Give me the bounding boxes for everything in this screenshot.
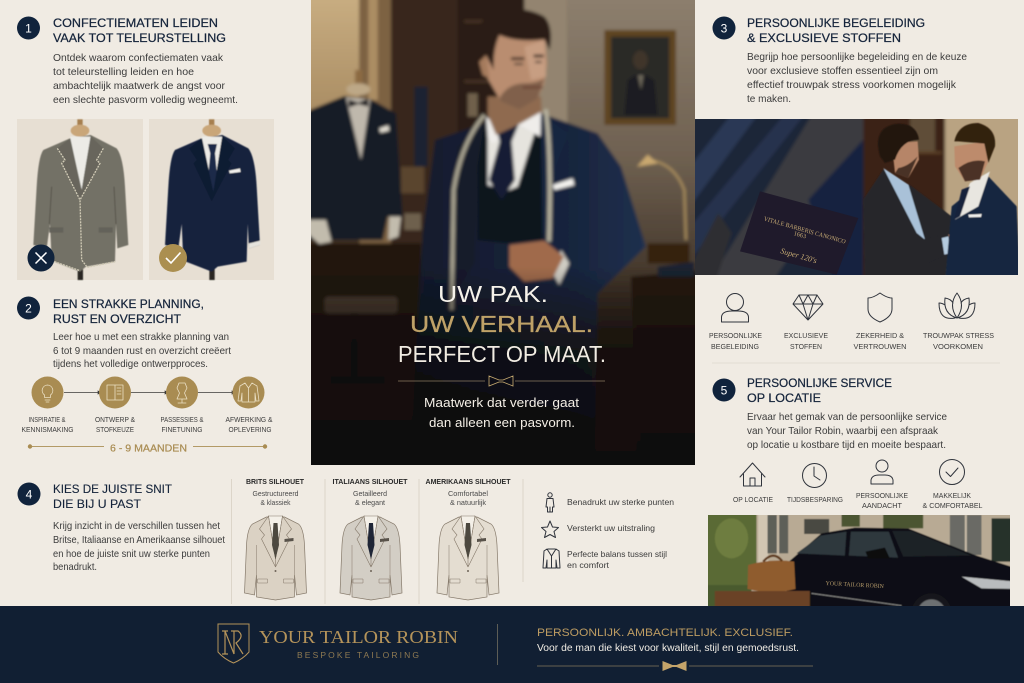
body text 3	[747, 51, 967, 105]
icon: exclusieve stoffen: STOFFEN	[790, 344, 822, 351]
panel 3: begeleiding	[685, 16, 1024, 351]
icon: makkelijk	[922, 460, 983, 510]
benefit: balans	[543, 549, 667, 570]
heading 4	[53, 482, 173, 511]
hero ornament	[398, 376, 605, 386]
bottom fade	[298, 267, 708, 480]
fabric label: VITALE BARBERIS CANONICO	[763, 216, 847, 246]
body text 3: effectief trouwpak stress voorkomen mogelijk	[747, 79, 957, 91]
brand name: YOUR TAILOR ROBIN	[259, 627, 458, 647]
icon: exclusieve stoffen	[784, 295, 828, 351]
duration bar	[28, 444, 267, 454]
benefit: sterke punten: Benadrukt uw sterke punten	[567, 497, 674, 507]
hero title: PERFECT OP MAAT.	[398, 341, 606, 367]
body text 4	[53, 520, 225, 573]
panel 5: service op locatie	[702, 376, 1018, 633]
heading 2: RUST EN OVERZICHT	[53, 312, 182, 326]
step: inspiratie: KENNISMAKING	[22, 427, 74, 434]
benefit: balans: Perfecte balans tussen stijl	[567, 549, 667, 559]
silhouet: italiaans: & elegant	[355, 498, 386, 507]
hero title	[398, 281, 606, 367]
heading 5: OP LOCATIE	[747, 391, 821, 405]
divider	[712, 362, 1000, 364]
icon: lotus: TROUWPAK STRESS	[923, 333, 994, 340]
body text 4: en hoe de juiste snit uw sterke punten	[53, 548, 210, 560]
step: passessies: FINETUNING	[162, 427, 202, 434]
silhouet: brits	[244, 477, 306, 600]
icon: tijdsbesparing: TIJDSBESPARING	[787, 497, 843, 504]
benefit: uitstraling: Versterkt uw uitstraling	[567, 523, 655, 533]
icon: persoonlijke aandacht	[856, 460, 908, 510]
body text 5: op locatie u kostbare tijd en moeite bespaart.	[747, 439, 946, 451]
panel 2: planning	[17, 296, 273, 454]
body text 1: een slechte pasvorm volledig wegneemt.	[53, 94, 238, 106]
silhouet: italiaans: ITALIAANS SILHOUET	[332, 477, 408, 486]
body text 1: tot teleurstelling leiden en hoe	[53, 66, 194, 78]
panel 4: snit	[18, 477, 674, 604]
badge 1	[17, 16, 40, 40]
icon: makkelijk: & COMFORTABEL	[922, 503, 983, 510]
step: afwerking	[226, 376, 273, 434]
heading 2	[53, 297, 204, 326]
fabric label: 1663	[793, 230, 807, 240]
silhouet: amerikaans	[426, 477, 511, 600]
heading 3: & EXCLUSIEVE STOFFEN	[747, 31, 901, 45]
icon: op locatie	[733, 463, 773, 504]
body text 5	[747, 411, 947, 451]
step: afwerking: OPLEVERING	[228, 427, 272, 434]
logo shield	[218, 624, 249, 663]
hero title: UW PAK.	[438, 281, 548, 307]
step: inspiratie	[22, 376, 74, 434]
body text 3: te maken.	[747, 93, 791, 105]
icon: persoonlijke begeleiding: PERSOONLIJKE	[709, 333, 762, 340]
hero title: UW VERHAAL.	[410, 311, 593, 337]
process timeline	[22, 376, 273, 454]
step: inspiratie: INSPIRATIE &	[28, 417, 66, 424]
icon: cross badge	[28, 244, 54, 272]
badge 2	[17, 296, 40, 320]
body text 4: benadrukt.	[53, 561, 97, 573]
body text 5: Ervaar het gemak van de persoonlijke service	[747, 411, 947, 423]
badge 1: 1	[25, 22, 32, 36]
photo: navy tailored jacket	[149, 119, 274, 280]
badge 2: 2	[25, 302, 32, 316]
duration bar: 6 - 9 MAANDEN	[110, 444, 187, 454]
body text 4: Britse, Italiaanse en Amerikaanse silhouet	[53, 534, 225, 546]
hero subtitle	[424, 395, 579, 430]
benefit: balans: en comfort	[567, 560, 610, 570]
brand name	[259, 627, 458, 660]
body text 3: voor exclusieve stoffen essentieel zijn om	[747, 65, 938, 77]
fitting figures	[863, 123, 1020, 283]
icon: zekerheid: VERTROUWEN	[854, 344, 906, 351]
icon: zekerheid	[854, 293, 906, 351]
body text 4: Krijg inzicht in de verschillen tussen het	[53, 520, 220, 532]
benefit: uitstraling	[542, 521, 655, 538]
silhouet: brits: Gestructureerd	[252, 489, 298, 498]
badge 3	[712, 16, 736, 40]
step: passessies	[160, 376, 204, 434]
footer ornament	[537, 661, 813, 671]
icon: persoonlijke begeleiding	[709, 294, 762, 351]
desk	[648, 243, 689, 263]
tagline	[537, 627, 799, 654]
step: ontwerp: ONTWERP &	[95, 417, 135, 424]
heading 1	[53, 16, 226, 45]
icon: lotus: VOORKOMEN	[933, 344, 983, 351]
fabric label	[740, 191, 858, 275]
panel 1: confectiematen	[17, 16, 274, 280]
heading 2: EEN STRAKKE PLANNING,	[53, 297, 204, 311]
step: passessies: PASSESSIES &	[160, 417, 204, 424]
icon: zekerheid: ZEKERHEID &	[856, 333, 904, 340]
heading 5	[747, 376, 892, 405]
heading 1: CONFECTIEMATEN LEIDEN	[53, 16, 218, 30]
step: afwerking: AFWERKING &	[226, 417, 273, 424]
photo: car on location	[708, 515, 1010, 606]
body text 2: tijdens het volledige ontwerpproces.	[53, 358, 208, 370]
wall and woodwork	[298, 0, 708, 478]
heading 4: KIES DE JUISTE SNIT	[53, 482, 173, 496]
heading 3	[747, 16, 925, 45]
body text 2	[53, 331, 231, 370]
lamp	[649, 160, 686, 240]
picture frame	[604, 30, 676, 125]
body text 2: Leer hoe u met een strakke planning van	[53, 331, 229, 343]
hero photo	[298, 0, 708, 480]
icon: check badge	[159, 244, 187, 272]
step: ontwerp	[95, 376, 135, 434]
body text 3: Begrijp hoe persoonlijke begeleiding en de keuze	[747, 51, 967, 63]
heading 4: DIE BIJ U PAST	[53, 497, 142, 511]
icon: tijdsbesparing	[787, 464, 843, 504]
shelf figure	[404, 213, 421, 230]
silhouet: brits: BRITS SILHOUET	[246, 477, 304, 486]
benefit: sterke punten	[546, 493, 674, 512]
silhouet: italiaans	[332, 477, 408, 600]
silhouet: italiaans: Getailleerd	[353, 489, 387, 498]
heading 3: PERSOONLIJKE BEGELEIDING	[747, 16, 925, 30]
mannequin	[298, 70, 403, 244]
icon: lotus	[923, 293, 994, 351]
brand name: BESPOKE TAILORING	[297, 650, 419, 660]
badge 4	[18, 482, 40, 506]
fabric label: Super 120's	[779, 246, 818, 265]
car lettering: YOUR TAILOR ROBIN	[825, 581, 885, 590]
tailor figure	[411, 9, 646, 478]
tagline: PERSOONLIJK. AMBACHTELIJK. EXCLUSIEF.	[537, 627, 793, 639]
heading 5: PERSOONLIJKE SERVICE	[747, 376, 892, 390]
body text 2: 6 tot 9 maanden rust en overzicht creëert	[53, 345, 231, 357]
photo: grey off-the-peg jacket	[17, 119, 143, 280]
body text 1	[53, 52, 238, 106]
badge 3: 3	[721, 22, 728, 36]
body text 5: van Your Tailor Robin, waarbij een afspraak	[747, 425, 939, 437]
silhouet: brits: & klassiek	[260, 498, 291, 507]
hero subtitle: Maatwerk dat verder gaat	[424, 395, 579, 410]
step: ontwerp: STOFKEUZE	[96, 427, 134, 434]
silhouet: amerikaans: Comfortabel	[448, 489, 488, 498]
icon: persoonlijke aandacht: PERSOONLIJKE	[856, 493, 908, 500]
icon: makkelijk: MAKKELIJK	[933, 493, 971, 500]
badge 5: 5	[721, 384, 728, 398]
body text 1: ambachtelijk maatwerk de angst voor	[53, 80, 225, 92]
icon: persoonlijke aandacht: AANDACHT	[862, 503, 903, 510]
footer band	[0, 606, 1024, 683]
heading 1: VAAK TOT TELEURSTELLING	[53, 31, 226, 45]
photo: fabric and fitting	[695, 119, 1018, 275]
tagline: Voor de man die kiest voor kwaliteit, stijl en gemoedsrust.	[537, 643, 799, 654]
icon: exclusieve stoffen: EXCLUSIEVE	[784, 333, 828, 340]
badge 4: 4	[26, 488, 33, 502]
silhouet: amerikaans: & natuurlijk	[450, 498, 486, 507]
icon: persoonlijke begeleiding: BEGELEIDING	[711, 344, 759, 351]
hero subtitle: dan alleen een pasvorm.	[429, 415, 575, 430]
body text 1: Ontdek waarom confectiematen vaak	[53, 52, 224, 64]
column dividers	[232, 479, 523, 604]
connector arrows	[64, 391, 235, 394]
badge 5	[712, 378, 736, 402]
icon: op locatie: OP LOCATIE	[733, 497, 773, 504]
silhouet: amerikaans: AMERIKAANS SILHOUET	[426, 477, 511, 486]
